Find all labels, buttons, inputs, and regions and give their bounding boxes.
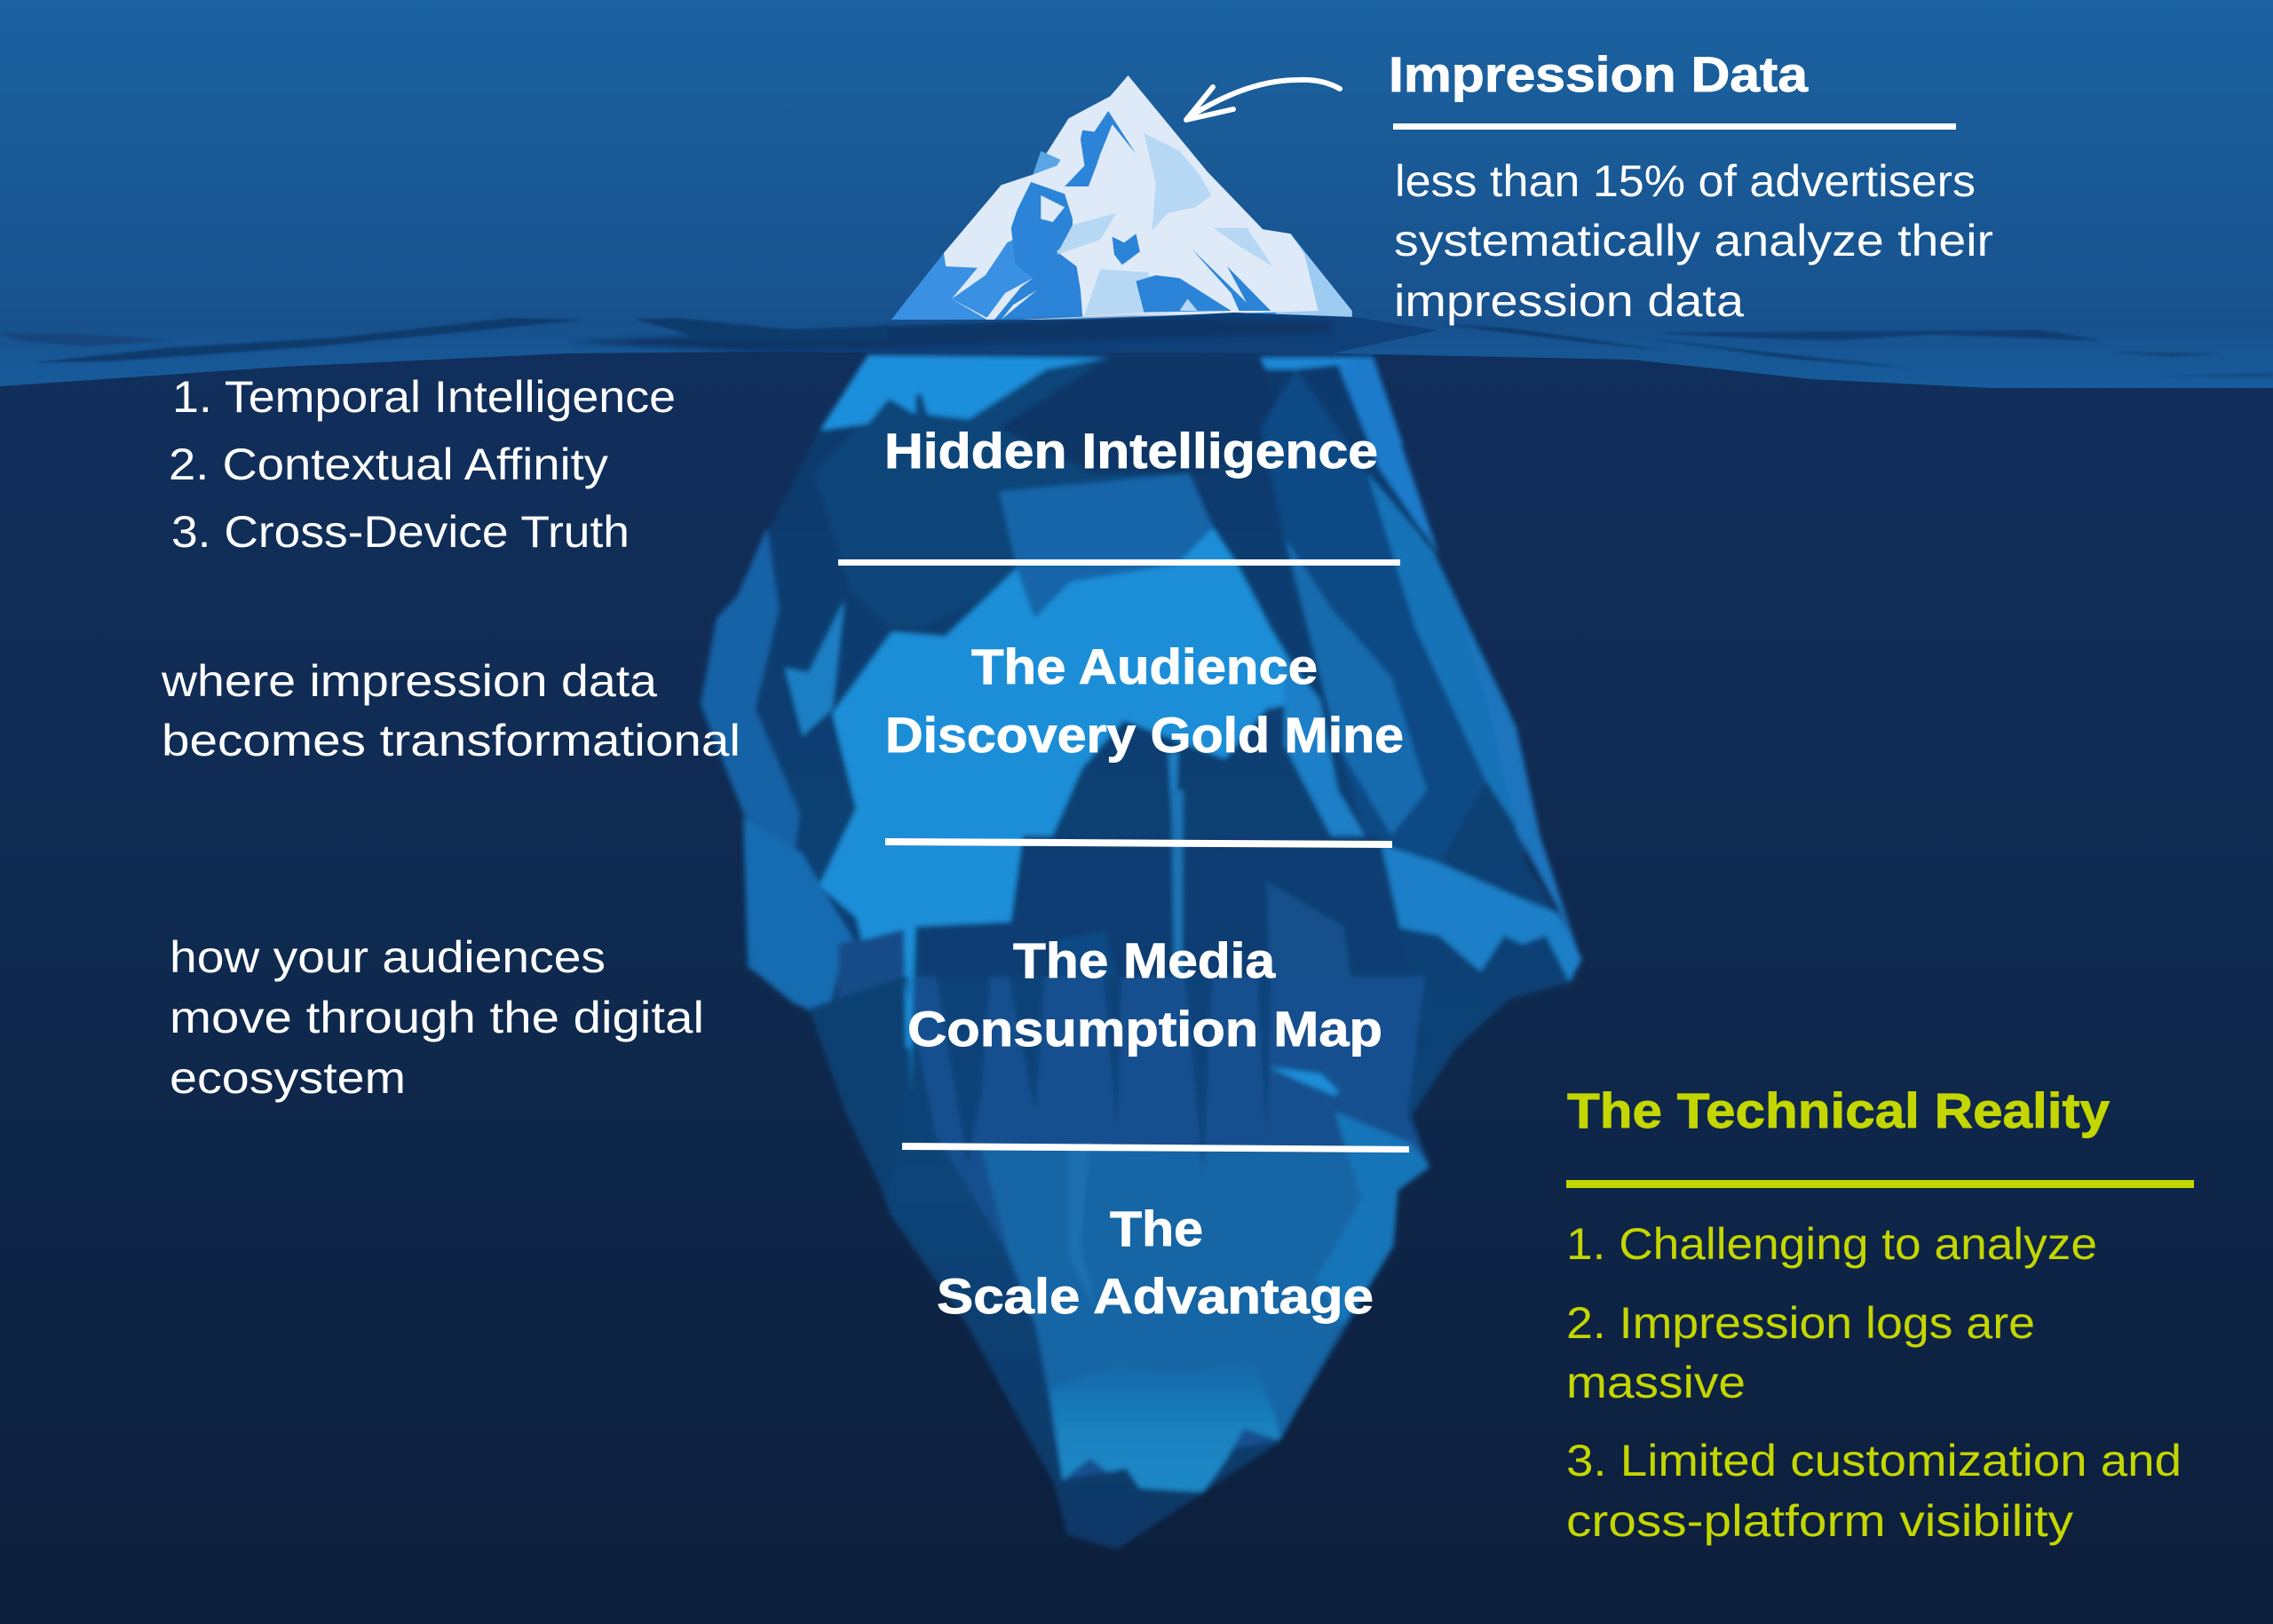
heading: impression data: Impression Data xyxy=(1389,46,1809,102)
left list: hidden intelligence items: 2. Contextual Affinity xyxy=(169,440,608,489)
left text: media consumption note: move through the digital xyxy=(170,993,704,1042)
left text: audience discovery note xyxy=(161,656,741,765)
background: deep water xyxy=(0,351,2273,1624)
label: media consumption map: Consumption Map xyxy=(907,1001,1382,1057)
iceberg: visible tip xyxy=(884,75,1352,329)
label: scale advantage xyxy=(937,1200,1374,1324)
body text: impression data: systematically analyze their xyxy=(1394,216,1993,265)
left text: media consumption note: how your audiences xyxy=(170,932,606,982)
label: audience discovery gold mine: Discovery Gold Mine xyxy=(885,707,1404,763)
list: technical challenges: 3. Limited customization and xyxy=(1566,1436,2182,1485)
divider 3 xyxy=(902,1143,1409,1153)
block: technical reality xyxy=(1566,1082,2194,1546)
label: hidden intelligence: Hidden Intelligence xyxy=(884,423,1378,479)
label: audience discovery gold mine xyxy=(885,638,1404,763)
label: audience discovery gold mine: The Audience xyxy=(971,638,1318,694)
heading rule xyxy=(1393,123,1956,130)
divider 1 xyxy=(838,559,1400,566)
left list: hidden intelligence items: 3. Cross-Device Truth xyxy=(171,507,630,557)
left text: audience discovery note: becomes transformational xyxy=(162,716,741,765)
body text: impression data: less than 15% of advertisers xyxy=(1395,156,1976,206)
label: scale advantage: The xyxy=(1110,1200,1203,1256)
label: media consumption map xyxy=(907,932,1382,1057)
arrow pointing to tip xyxy=(1186,80,1340,120)
label: media consumption map: The Media xyxy=(1013,932,1276,988)
left text: media consumption note: ecosystem xyxy=(170,1053,406,1103)
heading rule xyxy=(1566,1180,2194,1188)
water surface band xyxy=(0,313,2273,388)
block: impression data xyxy=(1389,46,1993,326)
list: technical challenges: 2. Impression logs are xyxy=(1566,1298,2035,1348)
left text: media consumption note xyxy=(170,932,704,1103)
left list: hidden intelligence items: 1. Temporal Intelligence xyxy=(172,372,676,422)
left list: hidden intelligence items xyxy=(169,372,676,557)
list: technical challenges xyxy=(1566,1219,2182,1546)
body text: impression data: impression data xyxy=(1394,276,1744,326)
background: sky water xyxy=(0,0,2273,355)
list: technical challenges: cross-platform visibility xyxy=(1566,1496,2073,1546)
list: technical challenges: 1. Challenging to analyze xyxy=(1566,1219,2097,1269)
left text: audience discovery note: where impression data xyxy=(161,656,657,706)
divider 2 xyxy=(885,838,1392,848)
heading: the technical reality: The Technical Reality xyxy=(1567,1082,2110,1138)
iceberg: submerged part xyxy=(699,353,1581,1549)
label: scale advantage: Scale Advantage xyxy=(937,1268,1374,1324)
list: technical challenges: massive xyxy=(1566,1358,1746,1407)
body text: impression data xyxy=(1394,156,1993,326)
